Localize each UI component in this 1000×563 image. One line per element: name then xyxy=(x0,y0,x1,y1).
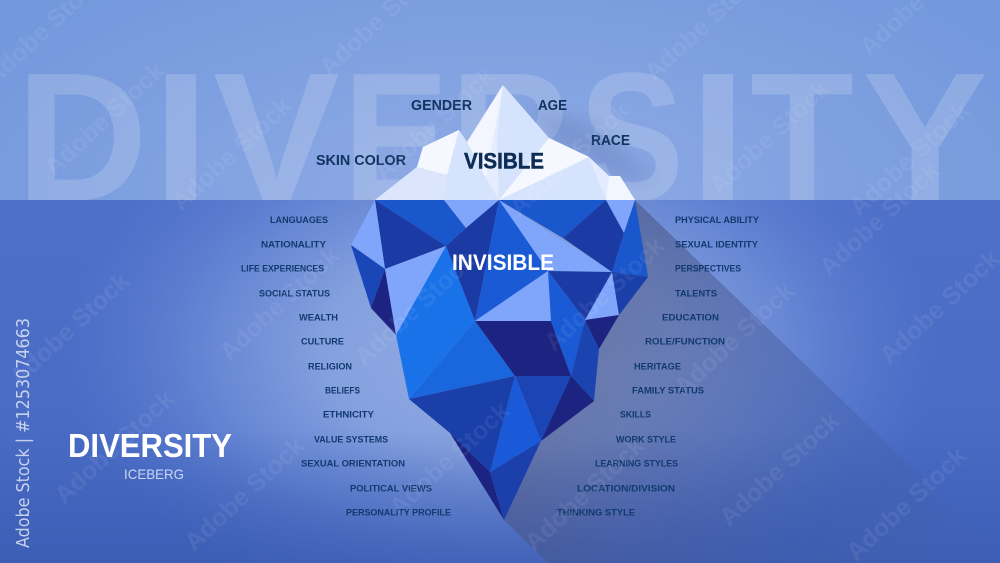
left list of invisible traits: LANGUAGES xyxy=(270,215,328,226)
right list of invisible traits: TALENTS xyxy=(675,288,717,300)
subtitle: ICEBERG xyxy=(124,466,184,482)
left list of invisible traits: CULTURE xyxy=(301,336,344,348)
title block xyxy=(68,427,232,482)
watermark: repeated stock marks: Adobe Stock xyxy=(669,277,800,401)
left list of invisible traits: SOCIAL STATUS xyxy=(259,288,330,300)
heading VISIBLE: VISIBLE xyxy=(464,148,544,174)
right list of invisible traits: SEXUAL IDENTITY xyxy=(675,240,759,250)
left list of invisible traits xyxy=(241,215,451,518)
watermark: repeated stock marks: Adobe Stock xyxy=(714,407,845,531)
right list of invisible traits: LEARNING STYLES xyxy=(595,458,678,470)
background word DIVERSITY: Y xyxy=(862,34,988,239)
watermark: repeated stock marks: Adobe Stock xyxy=(369,62,500,186)
watermark: repeated stock marks: Adobe Stock xyxy=(166,92,297,216)
watermark: repeated stock marks: Adobe Stock xyxy=(384,397,515,521)
watermark: repeated stock marks: Adobe Stock xyxy=(179,432,310,556)
top labels: AGE xyxy=(538,98,567,114)
watermark: repeated stock marks: Adobe Stock xyxy=(704,75,835,199)
right list of invisible traits: WORK STYLE xyxy=(616,434,676,446)
right list of invisible traits: HERITAGE xyxy=(634,362,681,372)
right list of invisible traits: LOCATION/DIVISION xyxy=(577,484,675,494)
watermark: repeated stock marks: Adobe Stock xyxy=(844,97,975,221)
iceberg xyxy=(351,85,648,520)
iceberg shadow above water xyxy=(530,105,655,182)
right list of invisible traits xyxy=(557,215,760,518)
iceberg tip: visible part xyxy=(375,85,635,200)
watermark: repeated stock marks: Adobe Stock xyxy=(841,442,972,563)
watermark: repeated stock marks: Adobe Stock xyxy=(814,157,945,281)
left list of invisible traits: SEXUAL ORIENTATION xyxy=(301,458,405,470)
watermark: repeated stock marks: Adobe Stock xyxy=(519,432,650,556)
watermark: repeated stock marks: Adobe Stock xyxy=(504,97,635,221)
background word DIVERSITY: I xyxy=(152,34,210,239)
right list of invisible traits: ROLE/FUNCTION xyxy=(645,336,725,348)
background: sky xyxy=(0,0,1000,200)
watermark: repeated stock marks: Adobe Stock xyxy=(39,57,170,181)
top labels xyxy=(316,98,630,169)
watermark: repeated stock marks: Adobe Stock xyxy=(214,242,345,366)
left list of invisible traits: NATIONALITY xyxy=(261,240,327,250)
title: DIVERSITY xyxy=(68,427,232,464)
left list of invisible traits: PERSONALITY PROFILE xyxy=(346,508,451,518)
iceberg long shadow under water xyxy=(504,200,1000,563)
iceberg body: invisible part xyxy=(351,200,648,520)
watermark: repeated stock marks: Adobe Stock xyxy=(539,232,670,356)
background word DIVERSITY: S xyxy=(579,34,684,239)
right list of invisible traits: THINKING STYLE xyxy=(557,508,635,518)
left list of invisible traits: BELIEFS xyxy=(325,386,360,396)
background: sea xyxy=(0,200,1000,563)
background word DIVERSITY: I xyxy=(689,34,747,239)
right list of invisible traits: PHYSICAL ABILITY xyxy=(675,215,760,226)
watermark: repeated stock marks: Adobe Stock xyxy=(4,267,135,391)
left list of invisible traits: VALUE SYSTEMS xyxy=(314,434,388,446)
heading INVISIBLE: INVISIBLE xyxy=(452,250,554,275)
left list of invisible traits: POLITICAL VIEWS xyxy=(350,484,432,494)
right list of invisible traits: EDUCATION xyxy=(662,312,719,324)
left list of invisible traits: RELIGION xyxy=(308,362,352,372)
watermark: repeated stock marks: Adobe Stock xyxy=(349,247,480,371)
left list of invisible traits: WEALTH xyxy=(299,312,338,324)
top labels: RACE xyxy=(591,133,630,149)
background word DIVERSITY: V xyxy=(213,34,340,239)
top labels: SKIN COLOR xyxy=(316,153,407,169)
background word DIVERSITY: R xyxy=(450,34,572,239)
left list of invisible traits: ETHNICITY xyxy=(323,410,375,420)
background word DIVERSITY: E xyxy=(343,34,449,239)
background word DIVERSITY: D xyxy=(16,34,148,239)
watermark: repeated stock marks: Adobe Stock xyxy=(49,385,180,509)
background word DIVERSITY: T xyxy=(750,34,854,239)
watermark: vertical stock id: Adobe Stock | #1253074663 xyxy=(13,318,34,548)
top labels: GENDER xyxy=(411,98,473,114)
right list of invisible traits: SKILLS xyxy=(620,410,651,420)
right list of invisible traits: PERSPECTIVES xyxy=(675,264,741,274)
background word DIVERSITY xyxy=(28,72,985,200)
left list of invisible traits: LIFE EXPERIENCES xyxy=(241,264,324,274)
right list of invisible traits: FAMILY STATUS xyxy=(632,386,704,396)
